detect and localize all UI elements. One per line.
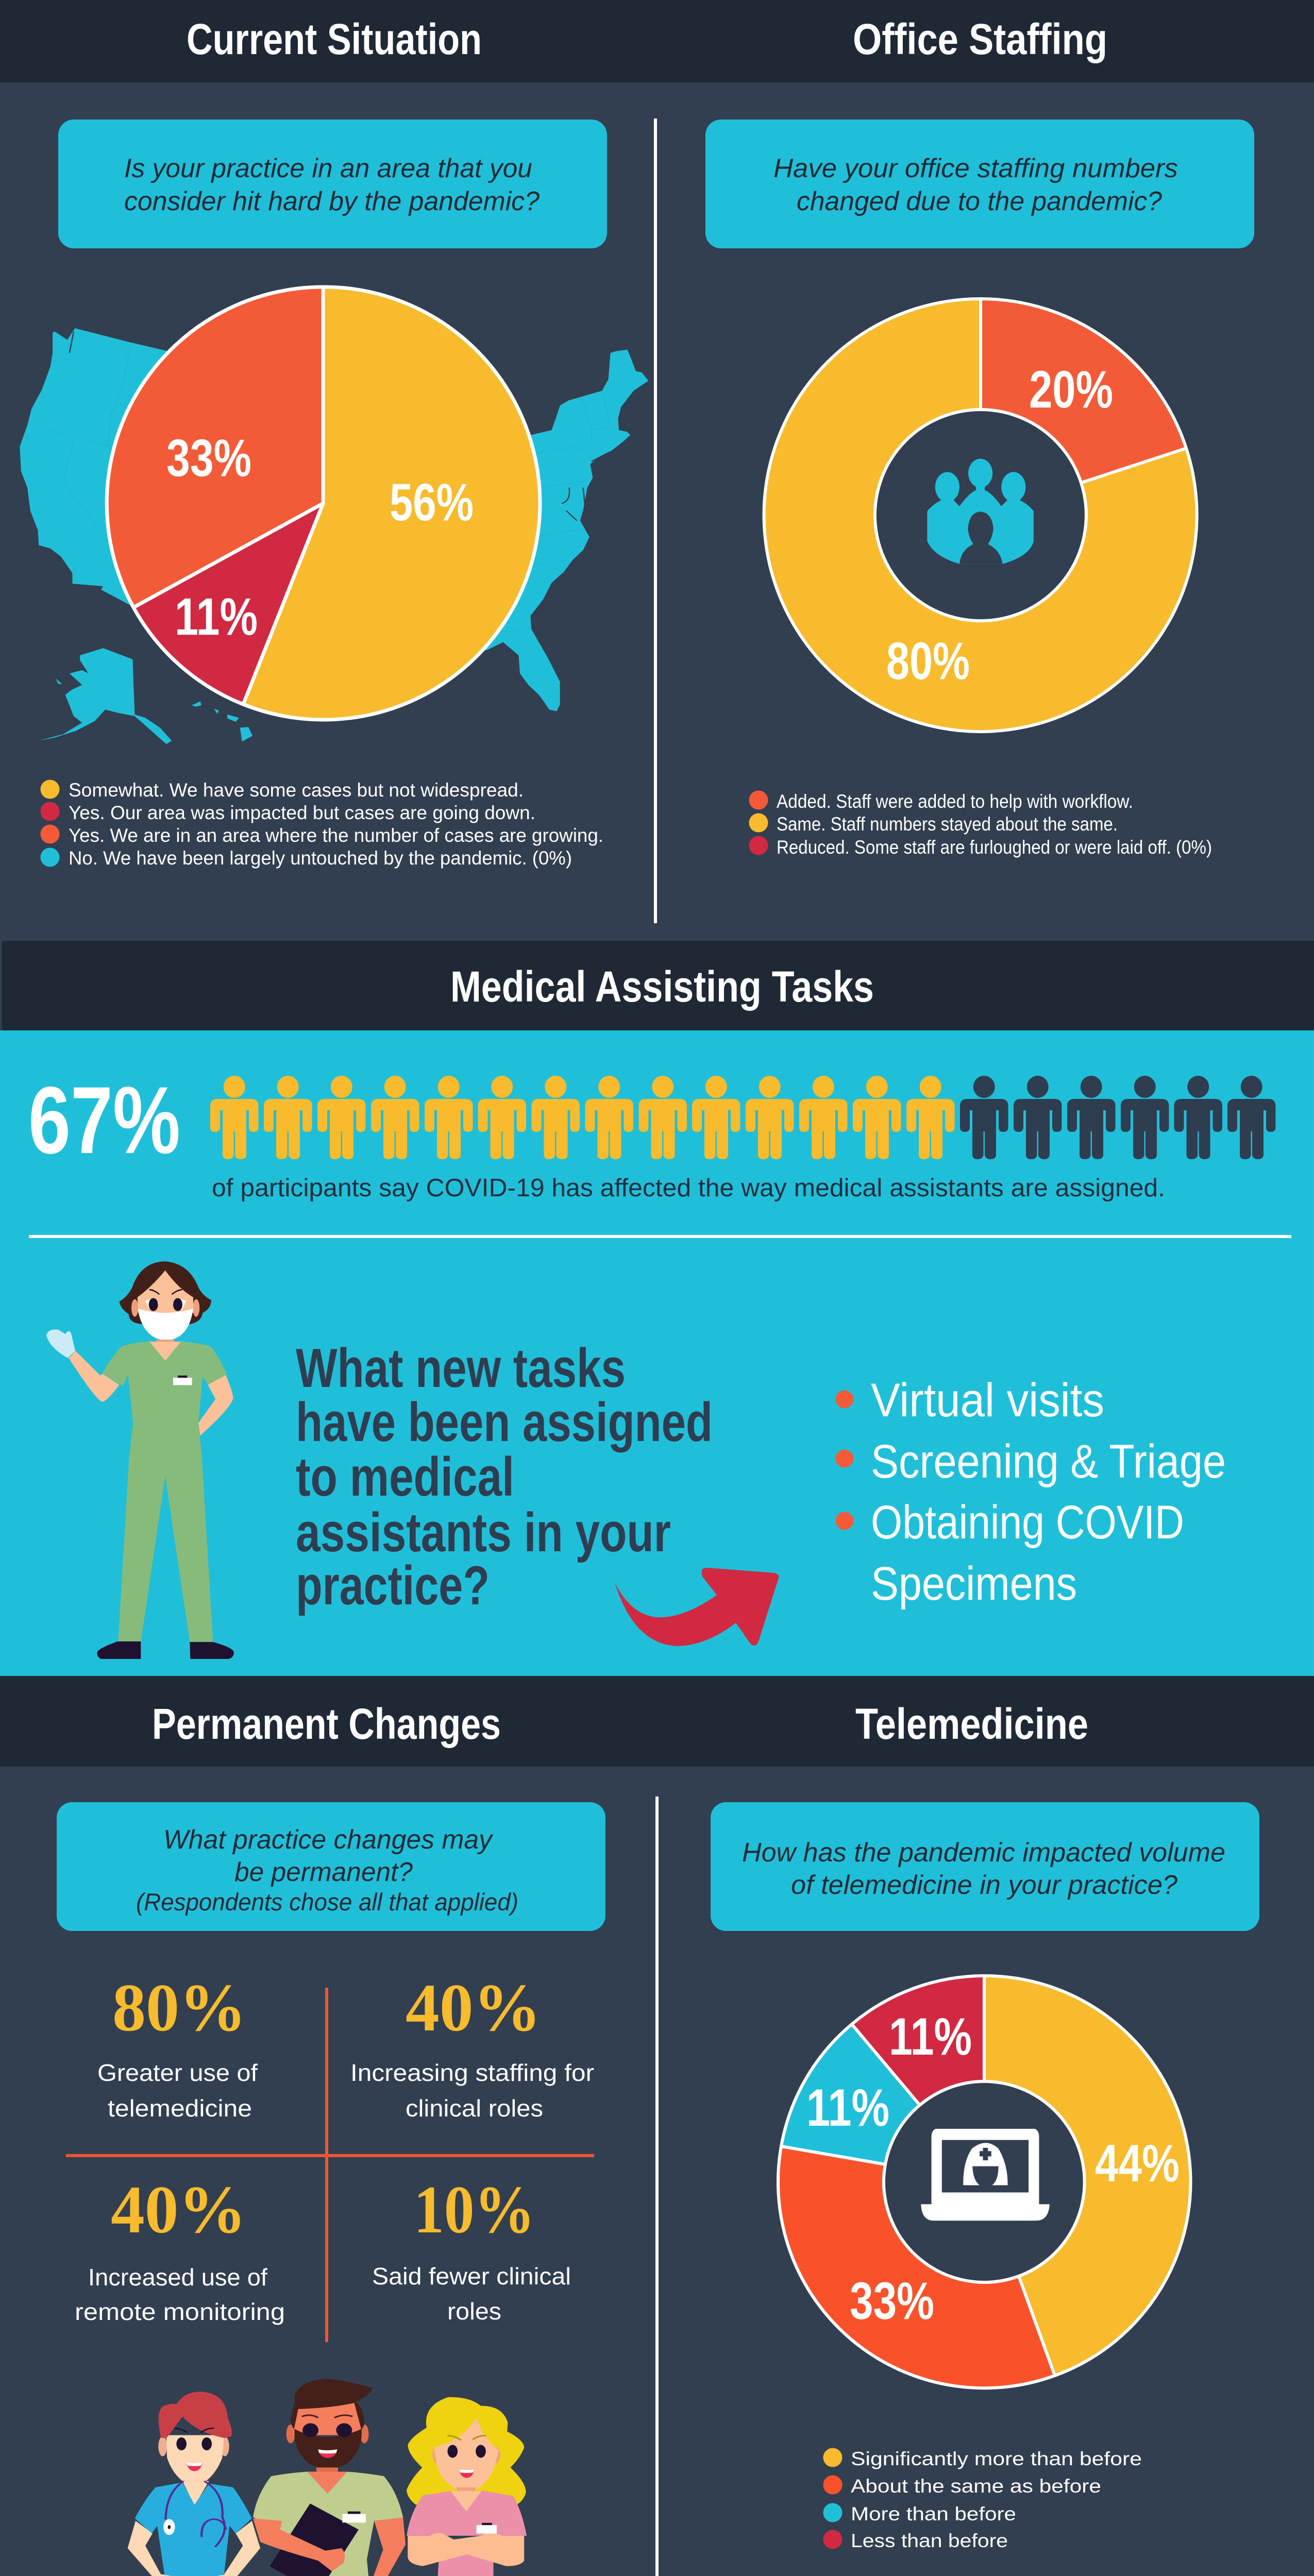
stat: remote monitoring 40%: Increased use of bbox=[88, 2264, 267, 2291]
question: new tasks: to medical bbox=[296, 1446, 514, 1507]
slice: same 80% bbox=[764, 299, 1197, 732]
question box: permanent: (Respondents chose all that applied) bbox=[136, 1888, 518, 1916]
slice: growing 33% bbox=[107, 287, 323, 607]
donut labels: 44% bbox=[1095, 2134, 1180, 2193]
question: new tasks: practice? bbox=[296, 1554, 490, 1616]
illustration: masked medical assistant bbox=[46, 1261, 234, 1659]
stat: telemedicine 80%: Greater use of bbox=[97, 2059, 258, 2086]
panel: current situation bbox=[0, 0, 657, 869]
stat: 67 percent: 67% bbox=[28, 1067, 180, 1174]
stat: staffing 40%: 40% bbox=[406, 1970, 541, 2045]
heading: telemedicine: Telemedicine bbox=[855, 1700, 1088, 1748]
heading: current situation bbox=[0, 0, 657, 82]
pie labels: 11% bbox=[175, 587, 258, 646]
donut labels: 33% bbox=[850, 2272, 934, 2330]
slice: more 11% bbox=[781, 2024, 920, 2164]
donut labels bbox=[806, 2007, 1180, 2330]
pie labels: 56% bbox=[390, 473, 474, 532]
arrow: to task list bbox=[615, 1568, 779, 1646]
list: new tasks: Screening & Triage bbox=[871, 1435, 1226, 1488]
icon: laptop with nurse bbox=[921, 2129, 1050, 2221]
question box: permanent: be permanent? bbox=[234, 1857, 413, 1887]
question: new tasks: What new tasks bbox=[296, 1337, 626, 1399]
heading: medical assisting tasks: Medical Assisting Tasks bbox=[450, 962, 874, 1011]
list: new tasks: Obtaining COVID bbox=[871, 1496, 1184, 1549]
pictogram: 14 of 20 people bbox=[210, 1076, 1276, 1159]
legend: telemedicine: Significantly more than before bbox=[851, 2448, 1142, 2469]
question box: telemedicine bbox=[711, 1802, 1259, 1931]
slice: somewhat 56% bbox=[243, 287, 540, 720]
legend: telemedicine: More than before bbox=[851, 2503, 1016, 2524]
legend: hit hard: Yes. Our area was impacted but cases are going down. bbox=[69, 802, 535, 823]
icon: staff group bbox=[927, 459, 1034, 564]
heading: permanent changes bbox=[0, 1676, 657, 1767]
stat: remote monitoring 40% bbox=[75, 2172, 285, 2325]
question box: staffing: changed due to the pandemic? bbox=[797, 187, 1162, 216]
legend: staffing: Added. Staff were added to help with workflow. bbox=[777, 791, 1133, 812]
heading: permanent changes: Permanent Changes bbox=[152, 1700, 501, 1748]
legend: staffing: Reduced. Some staff are furloughed or were laid off. (0%) bbox=[777, 837, 1212, 858]
stat: staffing 40%: Increasing staffing for bbox=[350, 2059, 594, 2086]
slice: significantly more 44% bbox=[984, 1976, 1191, 2376]
heading: office staffing: Office Staffing bbox=[853, 15, 1107, 63]
stat: fewer roles 10%: Said fewer clinical bbox=[372, 2263, 571, 2290]
legend: hit hard: Somewhat. We have some cases but not widespread. bbox=[69, 779, 524, 801]
donut labels: 11% bbox=[889, 2007, 972, 2066]
question: new tasks bbox=[296, 1337, 713, 1616]
question box: permanent bbox=[57, 1802, 605, 1931]
question box: telemedicine: How has the pandemic impacted volume bbox=[742, 1838, 1225, 1868]
heading: medical assisting tasks bbox=[2, 941, 1314, 1030]
donut chart: telemedicine volume bbox=[778, 1976, 1191, 2388]
heading: current situation: Current Situation bbox=[187, 15, 482, 63]
stat: telemedicine 80%: telemedicine bbox=[108, 2095, 252, 2122]
slice: less 11% bbox=[852, 1976, 984, 2105]
pie labels: 33% bbox=[166, 429, 251, 487]
question box: hit hard: consider hit hard by the pandemic? bbox=[124, 187, 540, 216]
pie chart: hit hard bbox=[107, 287, 540, 720]
stat: fewer roles 10%: roles bbox=[447, 2298, 501, 2325]
heading: telemedicine bbox=[657, 1676, 1314, 1767]
caption: participants: of participants say COVID-19 has affected the way medical assistants are assigned. bbox=[212, 1174, 1165, 1202]
donut labels: 20% bbox=[1029, 360, 1113, 419]
question: new tasks: have been assigned bbox=[296, 1391, 713, 1453]
legend: telemedicine: Less than before bbox=[851, 2530, 1008, 2551]
stat: staffing 40% bbox=[350, 1970, 594, 2122]
slice: added 20% bbox=[981, 299, 1186, 483]
figure: nurse with stethoscope bbox=[128, 2392, 260, 2576]
slice: going down 11% bbox=[133, 503, 323, 704]
panel: medical assisting tasks bbox=[0, 941, 1314, 1676]
legend: hit hard: Yes. We are in an area where the number of cases are growing. bbox=[69, 825, 603, 846]
figure: blonde nurse arms crossed bbox=[407, 2397, 527, 2576]
panel: telemedicine bbox=[657, 1676, 1314, 2551]
panel: office staffing bbox=[657, 0, 1314, 858]
stat: remote monitoring 40%: remote monitoring bbox=[75, 2298, 285, 2325]
stat: telemedicine 80%: 80% bbox=[112, 1970, 246, 2045]
question box: staffing bbox=[705, 120, 1254, 248]
list: new tasks bbox=[836, 1374, 1226, 1610]
list: new tasks: Specimens bbox=[871, 1557, 1077, 1610]
stat: fewer roles 10% bbox=[372, 2172, 571, 2325]
donut labels: 80% bbox=[886, 632, 970, 690]
question box: permanent: What practice changes may bbox=[163, 1825, 494, 1855]
stat: remote monitoring 40%: 40% bbox=[111, 2172, 246, 2247]
panel: permanent changes bbox=[0, 1676, 657, 2576]
legend: hit hard bbox=[40, 779, 603, 869]
legend: staffing bbox=[749, 790, 1212, 858]
donut chart: staffing bbox=[764, 299, 1197, 732]
question: new tasks: assistants in your bbox=[296, 1501, 671, 1563]
question box: telemedicine: of telemedicine in your practice? bbox=[791, 1870, 1177, 1900]
stat: fewer roles 10%: 10% bbox=[414, 2172, 535, 2247]
stat: staffing 40%: clinical roles bbox=[406, 2095, 543, 2122]
donut labels bbox=[886, 360, 1113, 690]
donut labels: 11% bbox=[806, 2078, 889, 2137]
slice: same 33% bbox=[778, 2146, 1055, 2388]
list: new tasks: Virtual visits bbox=[871, 1374, 1104, 1427]
question box: staffing: Have your office staffing numbers bbox=[773, 154, 1178, 183]
figure: bearded nurse with clipboard bbox=[253, 2379, 406, 2576]
legend: hit hard: No. We have been largely untouched by the pandemic. (0%) bbox=[69, 848, 572, 869]
stat: telemedicine 80% bbox=[97, 1970, 258, 2122]
heading: office staffing bbox=[657, 0, 1314, 82]
legend: telemedicine: About the same as before bbox=[851, 2476, 1101, 2497]
map: United States bbox=[20, 328, 648, 744]
legend: staffing: Same. Staff numbers stayed about the same. bbox=[777, 814, 1118, 835]
legend: telemedicine bbox=[823, 2448, 1142, 2551]
pie labels bbox=[166, 429, 474, 646]
illustration: three staff members bbox=[128, 2379, 527, 2576]
question box: hit hard: Is your practice in an area that you bbox=[124, 154, 532, 183]
question box: hit hard bbox=[58, 120, 607, 248]
